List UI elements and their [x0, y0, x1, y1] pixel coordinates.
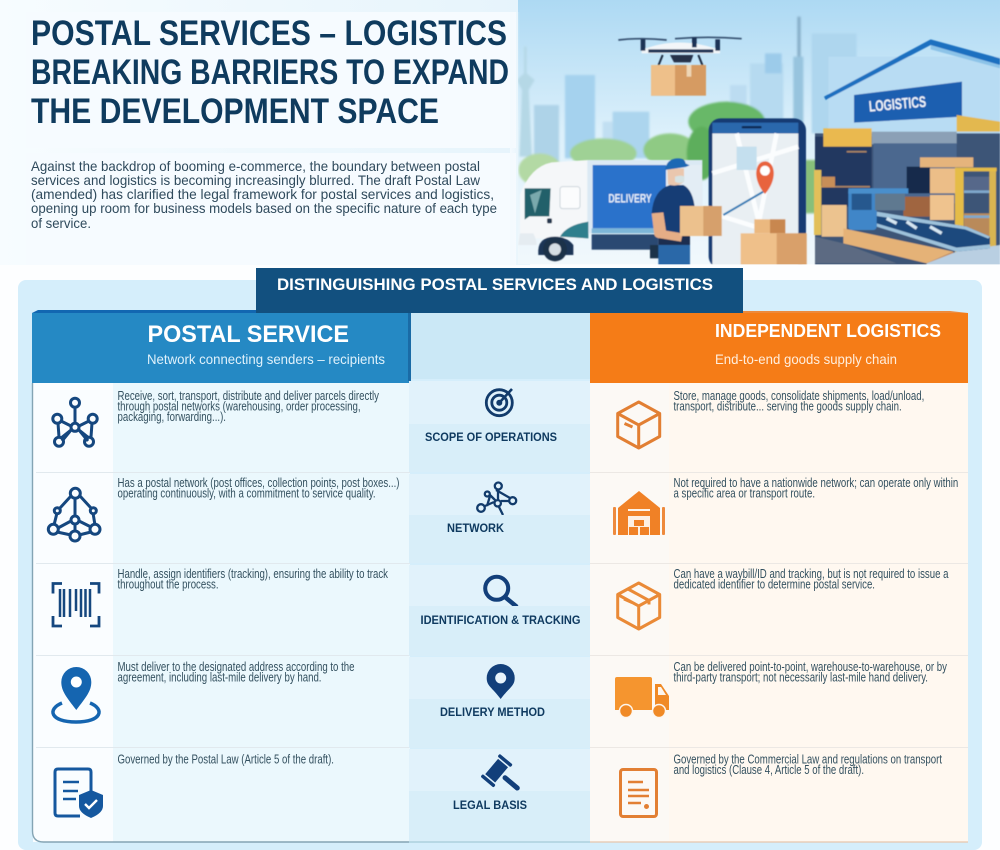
postal row 3: identification [53, 566, 388, 626]
criterion: identification and tracking [409, 565, 590, 656]
postal row 2: network: Has a postal network (post offices, collection points, post boxes...) [118, 475, 400, 490]
delivery truck [520, 160, 588, 238]
icon: warehouse [613, 491, 665, 535]
icon: barcode [53, 584, 99, 626]
postal row 4: delivery: Must deliver to the designated address according to the [118, 659, 354, 674]
title: POSTAL SERVICES – LOGISTICS [31, 14, 507, 53]
logistics row 1: scope: transport, distribute... serving the goods supply chain. [674, 398, 902, 414]
criterion: delivery method: DELIVERY METHOD [440, 705, 545, 719]
icon: location pin on ring [53, 667, 99, 722]
forklift truck and conveyor [843, 228, 953, 263]
criterion: network: NETWORK [447, 521, 504, 535]
racks with parcels [930, 168, 957, 193]
postal row 1: scope: packaging, forwarding...). [118, 409, 226, 424]
logistics row 4: delivery [615, 659, 947, 718]
postal row 4: delivery: agreement, including last-mile delivery by hand. [118, 670, 322, 684]
header illustration: delivery and logistics scene: LOGISTICS [868, 94, 927, 116]
intro text block: of service. [31, 215, 91, 231]
warehouse building [828, 57, 1000, 137]
intro text block [31, 158, 497, 231]
criterion: legal basis: LEGAL BASIS [453, 798, 527, 812]
icon: network star [53, 398, 97, 446]
postal service column [32, 310, 411, 842]
fade edge [510, 12, 520, 265]
postal row 1: scope: through postal networks (warehousing, order processing, [118, 398, 360, 414]
postal row 4: delivery [53, 659, 355, 722]
skyline [518, 47, 534, 158]
header illustration: delivery and logistics scene: DELIVERY [608, 192, 652, 206]
logistics header: INDEPENDENT LOGISTICS [715, 320, 941, 341]
postal row 1: scope [53, 388, 379, 446]
logistics row 5: legal [620, 752, 942, 816]
icon: truck [615, 677, 669, 718]
section heading bar [256, 268, 743, 313]
logistics row 2: network [613, 475, 958, 535]
criterion: network [409, 474, 590, 563]
independent logistics column [590, 311, 968, 842]
logistics row 3: identification [618, 566, 949, 629]
intro text block: (amended) has clarified the legal framework for postal services and logistics, [31, 186, 494, 202]
icon: contract document [620, 770, 656, 816]
intro text block: Against the backdrop of booming e-commerce, the boundary between postal [31, 158, 480, 174]
icon: taped parcel [618, 583, 660, 629]
section heading bar: DISTINGUISHING POSTAL SERVICES AND LOGISTICS [277, 275, 713, 294]
icon: network mesh [48, 488, 100, 541]
courier [652, 185, 697, 233]
logistics row 2: network: a specific area or transport route. [674, 486, 815, 500]
header text panel background [0, 0, 530, 265]
postal row 1: scope: Receive, sort, transport, distribute and deliver parcels directly [118, 388, 379, 403]
drone [618, 37, 742, 40]
postal row 5: legal: Governed by the Postal Law (Article 5 of the draft). [118, 752, 334, 766]
logistics row 1: scope [618, 388, 924, 448]
center criteria column [409, 313, 590, 842]
criterion: identification and tracking: IDENTIFICATION & TRACKING [420, 613, 580, 627]
title [31, 14, 509, 131]
title: THE DEVELOPMENT SPACE [31, 92, 439, 131]
criterion: legal basis [409, 749, 590, 842]
header illustration: delivery and logistics scene [510, 0, 1000, 268]
criterion: scope of operations: SCOPE OF OPERATIONS [425, 430, 557, 444]
comparison panel background [18, 280, 982, 850]
logistics rows background [590, 383, 968, 842]
parcels by phone [754, 219, 785, 233]
center header [411, 313, 590, 379]
postal row 3: identification: throughout the process. [118, 576, 218, 592]
intro text block: services and logistics is becoming increasingly blurred. The draft Postal Law [31, 172, 481, 188]
logistics row 5: legal: and logistics (Clause 4, Article 5 of the draft). [674, 762, 864, 777]
criterion: scope of operations [409, 381, 590, 472]
intro text block: opening up room for business models based on the specific nature of each type [31, 200, 497, 216]
trees [518, 153, 562, 187]
postal row 2: network: operating continuously, with a commitment to service quality. [118, 486, 376, 500]
postal row 5: legal [55, 752, 334, 818]
postal row 2: network [48, 475, 400, 541]
logistics row 3: identification: dedicated identifier to determine postal service. [674, 576, 875, 592]
postal rows background [33, 383, 410, 842]
postal header [32, 310, 411, 383]
icon: document with shield [55, 769, 103, 818]
criterion: delivery method [409, 657, 590, 748]
logistics header: End-to-end goods supply chain [715, 351, 897, 367]
title: BREAKING BARRIERS TO EXPAND [31, 53, 509, 92]
postal header: POSTAL SERVICE [148, 321, 349, 348]
logistics header [590, 311, 968, 383]
phone [709, 118, 806, 268]
postal row 3: identification: Handle, assign identifiers (tracking), ensuring the ability to track [118, 566, 388, 581]
icon: box [618, 402, 660, 448]
postal header: Network connecting senders – recipients [147, 351, 385, 367]
